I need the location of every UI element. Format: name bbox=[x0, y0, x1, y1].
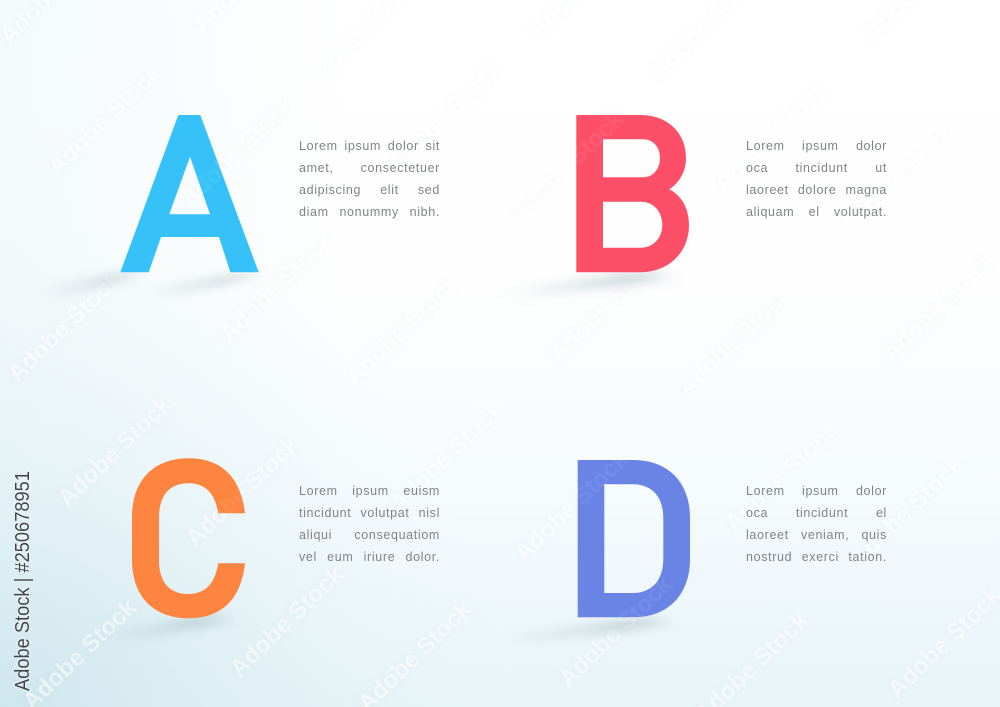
text block C: tincidunt volutpat nisl bbox=[299, 506, 440, 520]
text block B: oca tincidunt ut bbox=[746, 160, 887, 174]
letter shadows bbox=[30, 270, 680, 641]
watermark pattern: Adobe Stock bbox=[215, 225, 339, 347]
watermark pattern: Adobe Stock bbox=[53, 390, 177, 512]
text block D: nostrud exerci tation. bbox=[746, 550, 887, 564]
watermark tint over letters: Adobe Stock bbox=[554, 570, 678, 692]
watermark pattern: Adobe Stock bbox=[878, 245, 1000, 367]
text block A: amet, consectetuer bbox=[299, 160, 440, 174]
watermark pattern: Adobe Stock bbox=[845, 450, 969, 572]
watermark pattern: Adobe Stock bbox=[545, 245, 669, 367]
text block A: Lorem ipsum dolor sit bbox=[299, 138, 440, 152]
watermark tint over letters: Adobe Stock bbox=[510, 445, 634, 567]
letter C bbox=[132, 458, 245, 618]
text block D: Lorem ipsum dolor bbox=[746, 484, 887, 498]
text block D bbox=[746, 484, 887, 564]
text block C bbox=[299, 484, 440, 564]
text block C: vel eum iriure dolor. bbox=[299, 550, 440, 564]
watermark tint over letters: Adobe Stock bbox=[505, 105, 629, 227]
watermark pattern: Adobe Stock bbox=[385, 395, 509, 517]
text block D: laoreet veniam, quis bbox=[746, 528, 887, 542]
watermark pattern: Adobe Stock bbox=[835, 118, 959, 240]
text block C: aliqui consequatiom bbox=[299, 528, 440, 542]
watermark pattern: Adobe Stock bbox=[225, 560, 349, 682]
stock id label: Adobe Stock | #250678951 bbox=[11, 471, 34, 691]
text block B: Lorem ipsum dolor bbox=[746, 138, 887, 152]
watermark tint over letters bbox=[176, 90, 678, 692]
watermark tint over letters: Adobe Stock bbox=[176, 90, 300, 212]
text block B: laoreet dolore magna bbox=[746, 182, 887, 196]
text block B: aliquam el volutpat. bbox=[746, 204, 887, 218]
watermark pattern: Adobe Stock bbox=[510, 445, 634, 567]
watermark pattern: Adobe Stock bbox=[554, 570, 678, 692]
watermark pattern: Adobe Stock bbox=[720, 415, 844, 537]
letter A bbox=[120, 115, 259, 272]
text block A: adipiscing elit sed bbox=[299, 182, 440, 196]
watermark pattern: Adobe Stock bbox=[673, 280, 797, 402]
text block A: diam nonummy nibh. bbox=[299, 204, 440, 218]
text block B bbox=[746, 138, 887, 218]
watermark pattern: Adobe Stock bbox=[3, 265, 127, 387]
watermark pattern: Adobe Stock bbox=[383, 55, 507, 177]
watermark pattern: Adobe Stock bbox=[505, 105, 629, 227]
letter B bbox=[576, 115, 689, 272]
text block A bbox=[299, 138, 440, 218]
text block D: oca tincidunt el bbox=[746, 506, 887, 520]
watermark pattern: Adobe Stock bbox=[43, 58, 167, 180]
watermark pattern: Adobe Stock bbox=[181, 430, 305, 552]
watermark pattern: Adobe Stock bbox=[176, 90, 300, 212]
text block C: Lorem ipsum euism bbox=[299, 484, 440, 498]
watermark pattern: Adobe Stock bbox=[710, 75, 834, 197]
watermark tint over letters: Adobe Stock bbox=[181, 430, 305, 552]
watermark pattern: Adobe Stock bbox=[341, 268, 465, 390]
letter D bbox=[578, 460, 690, 617]
